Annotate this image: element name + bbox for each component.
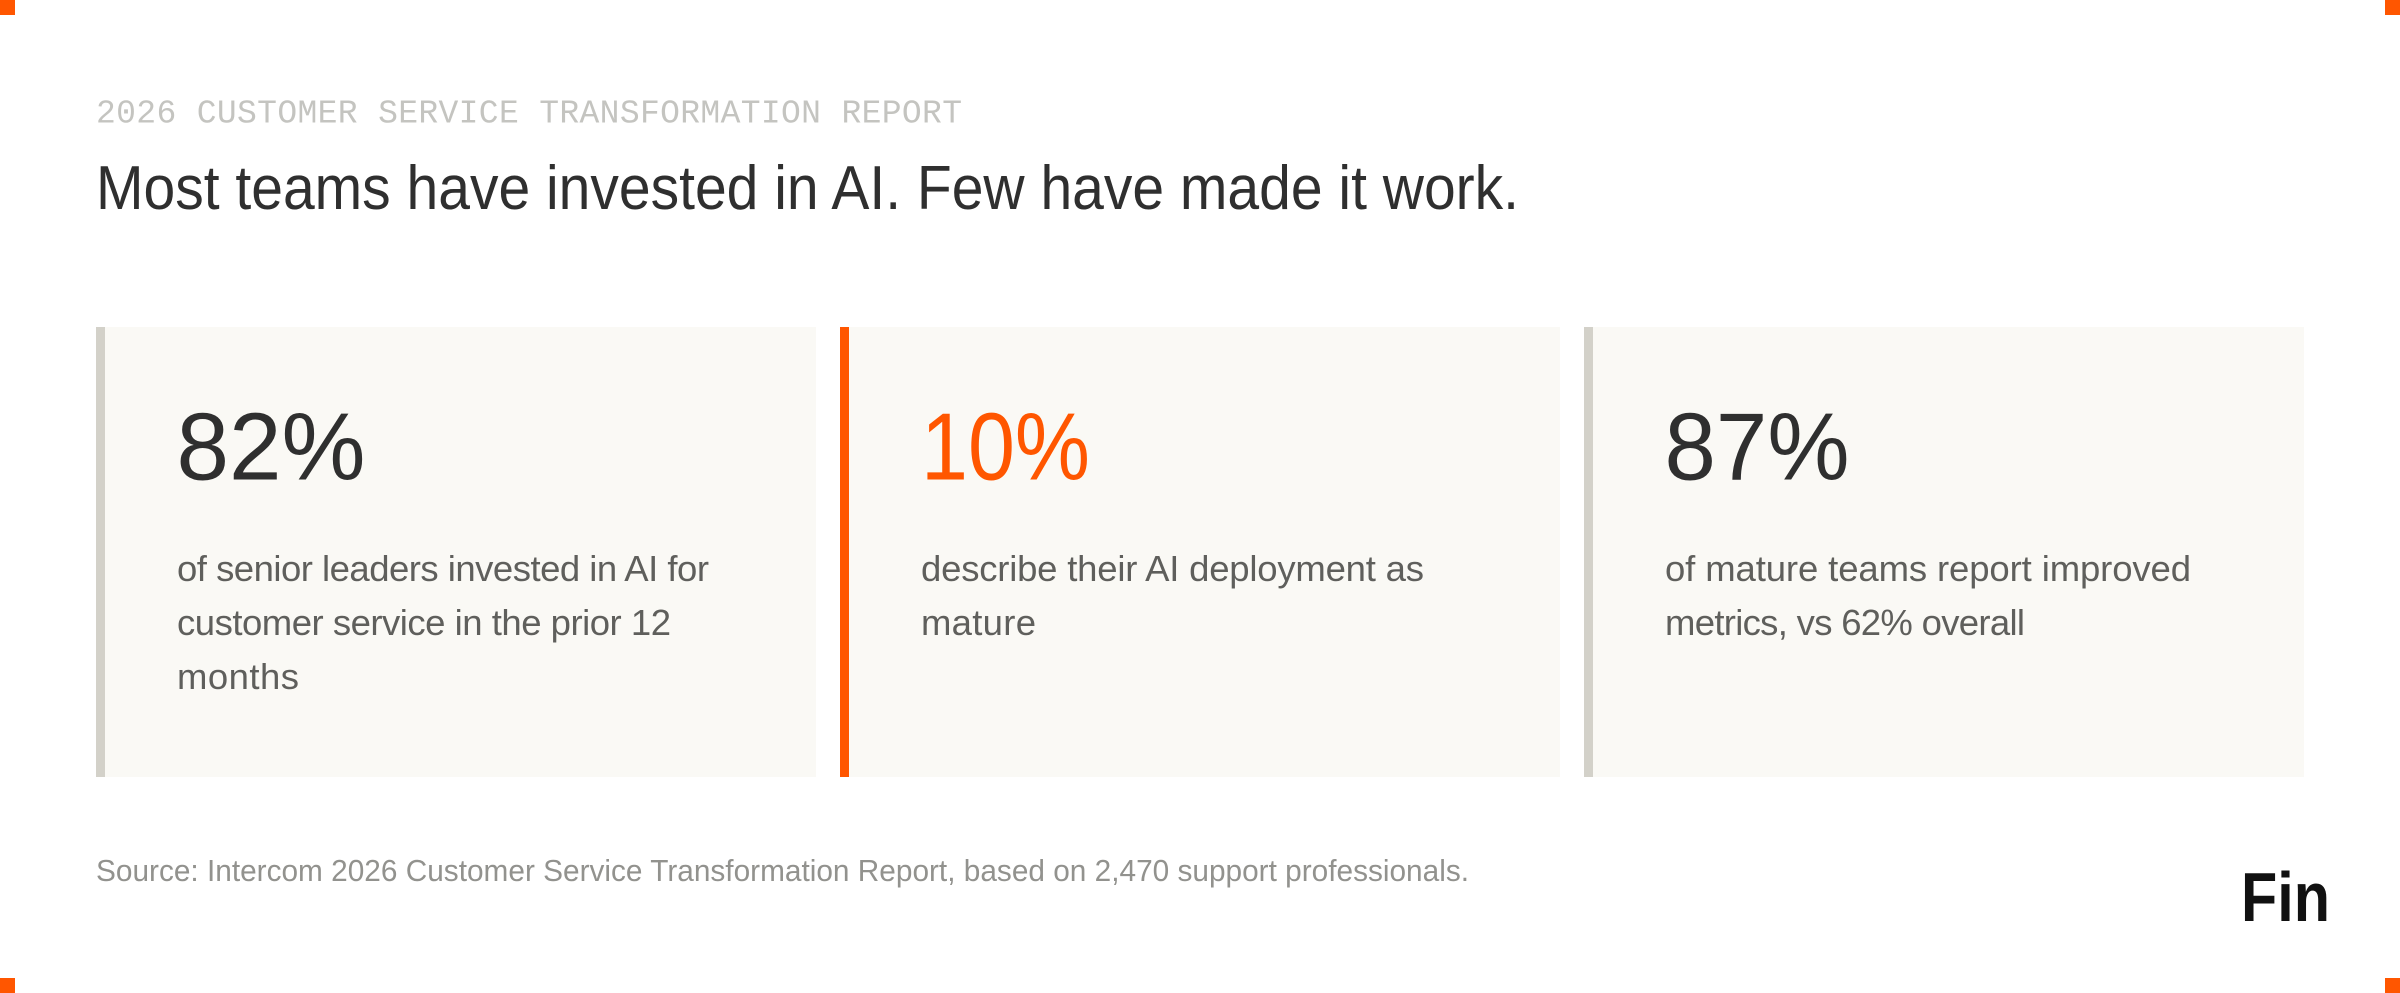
card background [96,327,816,777]
card accent bar [96,327,105,777]
stat description: describe their AI deployment as [921,548,1424,589]
logo: Fin: Fin [2241,858,2330,936]
panel: 10% stat [840,327,1560,777]
stat description: customer service in the prior 12 [177,602,671,643]
stat description: of mature teams report improved [1665,548,2191,589]
card accent bar [1584,327,1593,777]
title: Most teams have invested in AI. Few have made it work. [96,154,1519,223]
card accent bar [840,327,849,777]
card background [840,327,1560,777]
stat description: mature [921,602,1036,643]
eyebrow label: 2026 CUSTOMER SERVICE TRANSFORMATION REPORT [96,96,962,132]
panel: 82% stat [96,327,816,777]
panel: 87% stat [1584,327,2304,777]
stat number: 10% [921,394,1090,500]
stat description: months [177,656,299,697]
card background [1584,327,2304,777]
stat number: 82% [176,394,366,500]
stat number: 87% [1664,394,1850,500]
stat description: metrics, vs 62% overall [1665,602,2025,643]
stat description: of senior leaders invested in AI for [177,548,709,589]
source note: Source: Intercom 2026 Customer Service Transformation Report, based on 2,470 support professionals. [96,853,1469,888]
